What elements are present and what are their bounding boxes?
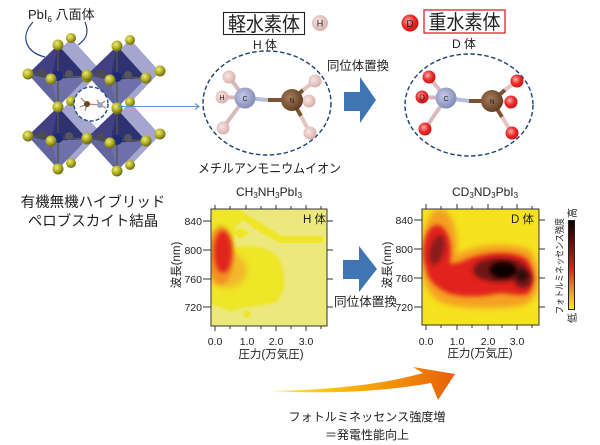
crystal caption: 有機無機ハイブリッド	[21, 193, 165, 211]
y axis labels: 840	[184, 216, 202, 228]
icon: D atom: D	[406, 19, 414, 30]
label: isotope substitution top: 同位体置換	[327, 59, 389, 73]
axis ticks	[414, 204, 545, 330]
legend high: 高	[566, 208, 579, 218]
icon: H atom: H	[317, 18, 323, 28]
legend: color bar	[554, 208, 579, 323]
arrow: top blue	[344, 77, 376, 123]
x axis labels: 1.0	[240, 336, 254, 348]
y axis labels: 800	[184, 245, 202, 257]
chart title: PbI	[496, 185, 514, 199]
molecule: D form: D	[419, 94, 425, 102]
heading: heavy hydrogen: 重水素体	[428, 11, 500, 34]
chart: H form heatmap	[170, 185, 333, 361]
x axis labels: 3.0	[510, 336, 524, 348]
x axis labels: 2.0	[269, 336, 283, 348]
label: PbI6 octahedron: PbI	[28, 7, 48, 22]
label: H form: H 体	[253, 38, 277, 52]
chart title: PbI	[280, 185, 298, 199]
y axis labels	[395, 215, 413, 314]
x axis labels: 2.0	[481, 336, 495, 348]
conclusion text: フォトルミネッセンス強度増	[288, 410, 446, 424]
y axis labels: 760	[395, 273, 413, 285]
label: D form: D 体	[452, 37, 476, 51]
x axis labels	[208, 336, 313, 348]
y axis title: 波長(nm)	[381, 242, 394, 288]
molecule: H form	[203, 51, 331, 155]
x axis title: 圧力(万気圧)	[447, 346, 513, 360]
axis ticks	[203, 205, 333, 331]
legend low: 低	[567, 313, 579, 323]
x axis labels	[419, 336, 524, 348]
icon: H atom	[312, 15, 328, 31]
heatmap field	[422, 209, 539, 325]
y axis labels: 760	[184, 274, 202, 286]
molecule: H form: H	[219, 95, 225, 102]
legend title: フォトルミネッセンス強度	[554, 218, 566, 314]
y axis labels	[184, 216, 202, 314]
y axis title: 波長(nm)	[170, 242, 183, 288]
molecule: D form: N	[489, 99, 495, 106]
label: PbI6 octahedron	[26, 7, 95, 57]
chart title: CH	[236, 185, 253, 199]
label: PbI6 octahedron: 6	[48, 15, 53, 24]
chart title: 3	[253, 191, 258, 200]
icon: cation in cage	[74, 87, 108, 121]
icon: D atom	[402, 14, 418, 32]
molecule: H form: N	[289, 98, 295, 105]
y axis labels: 720	[395, 302, 413, 314]
y axis labels: 840	[395, 215, 413, 227]
y axis labels: 720	[184, 302, 202, 314]
x axis title: 圧力(万気圧)	[238, 347, 304, 361]
arrow: orange gradient	[270, 367, 455, 400]
molecule: D form	[405, 54, 533, 156]
crystal structure	[22, 33, 166, 176]
x axis labels: 1.0	[450, 336, 464, 348]
molecule: H form: C	[242, 96, 248, 103]
chart title: CD	[452, 185, 469, 199]
label: methylammonium ion: メチルアンモニウムイオン	[198, 161, 341, 176]
heading: light hydrogen: 軽水素体	[228, 13, 300, 36]
arrow: crystal to molecule	[118, 104, 199, 110]
form label: H 体	[303, 212, 326, 226]
x axis labels: 3.0	[299, 336, 313, 348]
form label: D 体	[511, 212, 534, 226]
chart title: ND	[474, 185, 491, 199]
x axis labels: 0.0	[208, 336, 222, 348]
chart title: 3	[491, 191, 496, 200]
crystal caption: ペロブスカイト結晶	[28, 212, 158, 230]
chart title: 3	[275, 191, 280, 200]
chart title: NH	[258, 185, 275, 199]
chart title: 3	[514, 191, 519, 200]
conclusion text: ＝発電性能向上	[325, 427, 409, 442]
heatmap field	[205, 209, 327, 326]
x axis labels: 0.0	[419, 336, 433, 348]
chart: D form heatmap	[381, 185, 545, 360]
label: PbI6 octahedron: 八面体	[52, 7, 95, 22]
arrow: lower blue	[343, 246, 377, 292]
label: isotope substitution lower: 同位体置換	[334, 295, 397, 309]
conclusion text	[288, 410, 446, 442]
crystal caption	[21, 193, 165, 230]
chart title: 3	[298, 191, 303, 200]
chart title: 3	[469, 191, 474, 200]
y axis labels: 800	[395, 244, 413, 256]
molecule: D form: C	[443, 96, 449, 103]
